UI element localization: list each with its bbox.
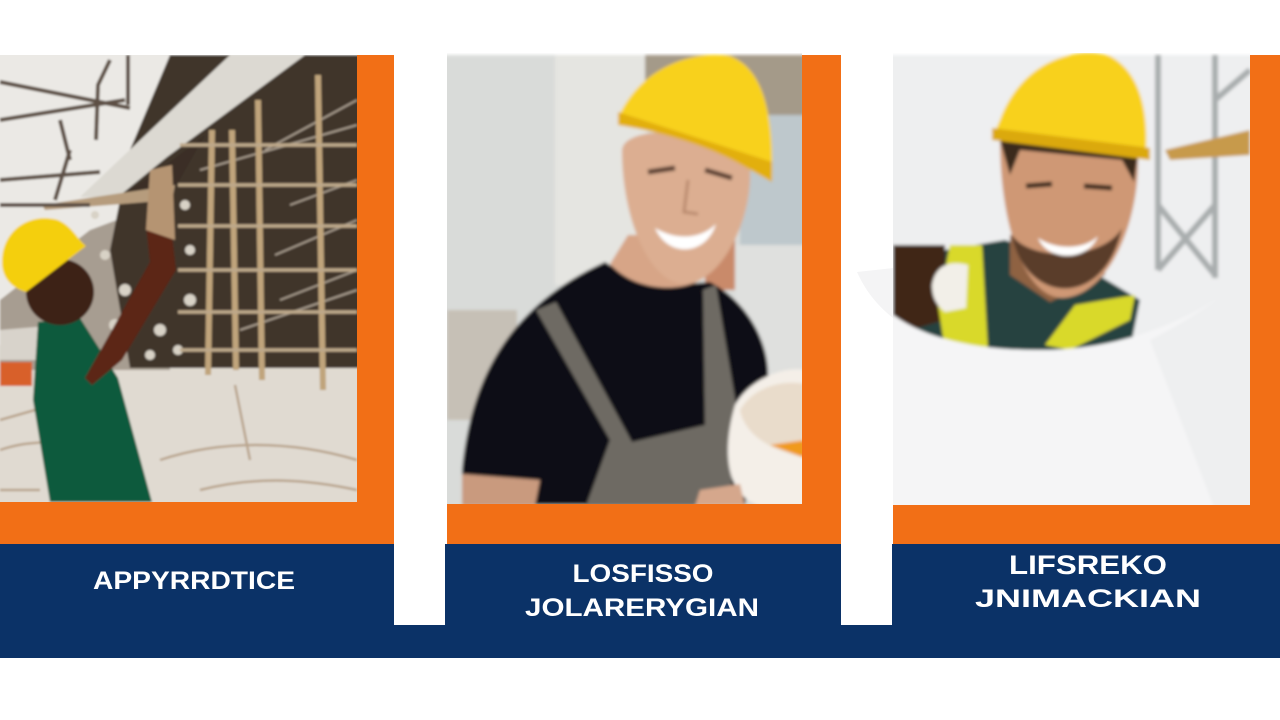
panel: apprentice [0, 50, 394, 544]
eyes and brows [648, 168, 732, 178]
blueprint edge left of photo [857, 268, 893, 318]
neck [610, 235, 700, 288]
bucket [728, 369, 805, 506]
panel: second worker [440, 55, 841, 544]
concrete beam [80, 55, 305, 197]
apron [536, 285, 737, 506]
label: third worker [975, 550, 1201, 613]
scaffold [1158, 55, 1250, 278]
label: third worker: LIFSREKO [1009, 550, 1167, 580]
mottled lower-left wall [0, 220, 171, 372]
panel: third worker [857, 53, 1280, 544]
photo: apprentice on site [0, 50, 360, 505]
neck and head [1010, 235, 1105, 302]
label: second worker [525, 560, 759, 622]
torso [462, 262, 768, 505]
orange frame 3 [893, 55, 1280, 544]
head [622, 133, 750, 284]
label: second worker: LOSFISSO [572, 560, 714, 588]
label: second worker: JOLARERYGIAN [525, 594, 759, 622]
helmet [992, 53, 1150, 160]
eyes and brows [1026, 184, 1112, 188]
orange frame 2 [447, 55, 841, 544]
worker torso [893, 240, 1140, 350]
helmet [618, 55, 772, 180]
label: apprentice: APPYRRDTICE [93, 567, 295, 595]
white gaps [394, 544, 445, 625]
photo: smiling worker in apron [440, 55, 805, 510]
orange frame 1 [0, 55, 394, 544]
photo: worker holding blueprint [893, 53, 1250, 505]
navy footer band [0, 544, 1280, 658]
label: third worker: JNIMACKIAN [975, 585, 1201, 613]
worker [2, 165, 176, 502]
hair [1000, 140, 1138, 182]
blueprint roll [893, 313, 1136, 353]
